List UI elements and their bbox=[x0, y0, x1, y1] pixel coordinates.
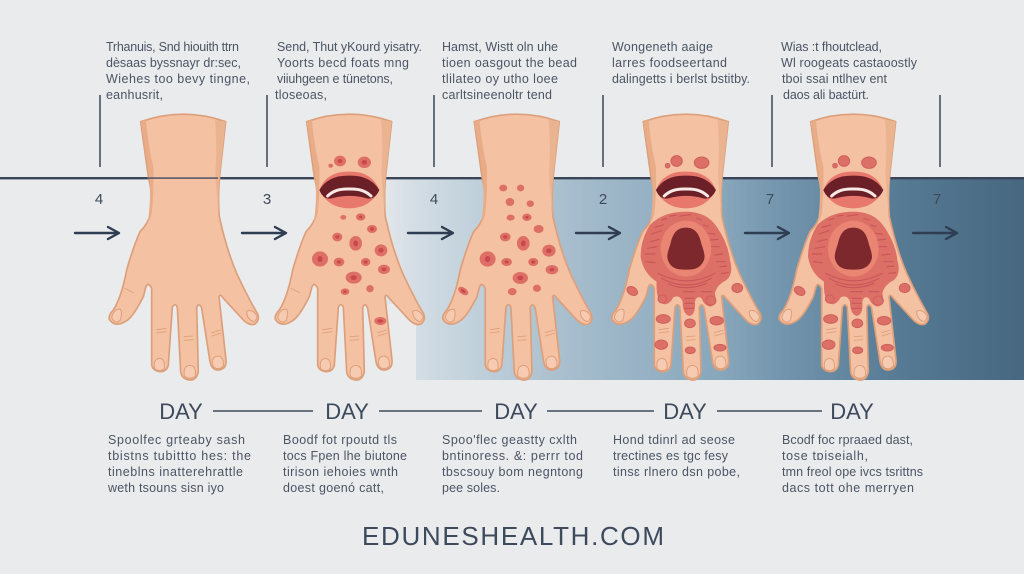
bottom text: column 3: pee soles. bbox=[442, 481, 500, 495]
top text: column 2: Send, Thut yKourd yisatry. bbox=[277, 40, 422, 54]
bottom text: column 4: trectines es tgc fesy bbox=[613, 449, 729, 463]
top text: column 2 bbox=[275, 40, 422, 102]
top text: column 4: larres foodseertand bbox=[612, 56, 727, 70]
top text: column 4: dalingetts i berlst bstitby. bbox=[612, 72, 750, 86]
rash patch bbox=[793, 156, 910, 354]
hand 2: early rash bbox=[275, 114, 424, 380]
bottom text: column 1: tbistns tubittto hes: the bbox=[108, 449, 251, 463]
day connectors bbox=[213, 410, 822, 412]
mouth sore bbox=[823, 172, 883, 208]
bottom text: column 2 bbox=[283, 433, 407, 495]
top text: column 2: tloseoas, bbox=[275, 88, 327, 102]
lesions bbox=[457, 185, 558, 297]
top text: column 3: carltsineenoltr tend bbox=[442, 88, 552, 102]
day labels: DAY bbox=[494, 399, 538, 424]
arrows bbox=[75, 227, 957, 239]
bottom text: column 3: bntinoress. &: perrr tod bbox=[442, 449, 583, 463]
hand 3: spreading spots bbox=[443, 114, 592, 380]
bottom text: column 4: tinsɛ rlnero dsn pobe, bbox=[613, 465, 740, 479]
top text: column 1: Wiehes too bevy tingne, bbox=[106, 72, 250, 86]
top text: column 3 bbox=[442, 40, 577, 102]
bottom text: column 5: Bcodf foc rpraaed dast, bbox=[782, 433, 913, 447]
day labels: DAY bbox=[159, 399, 203, 424]
footer website: EDUNESHEALTH.COM bbox=[362, 521, 664, 551]
bottom text: column 5: tmn freol ope ivcs tsrittns bbox=[782, 465, 923, 479]
day labels: DAY bbox=[830, 399, 874, 424]
top text: column 3: tioen oasgout the bead bbox=[442, 56, 577, 70]
fade behind second hand bbox=[370, 179, 416, 304]
top text: column 1: Trhanuis, Snd hiouith ttrn bbox=[106, 40, 239, 54]
stage numbers: 7 bbox=[933, 191, 941, 208]
stage numbers: 4 bbox=[430, 191, 438, 208]
bottom text: column 1: Spoolfec grteaby sash bbox=[108, 433, 245, 447]
bottom text: column 2: tirison iehoies wnth bbox=[283, 465, 398, 479]
top text: column 2: Yoorts becd foats mng bbox=[277, 56, 409, 70]
hand 4: severe patch bbox=[612, 114, 761, 380]
hand 1: healthy bbox=[109, 114, 258, 380]
bottom text: column 2: Boodf fot rpoutd tls bbox=[283, 433, 397, 447]
bottom text: column 3 bbox=[442, 433, 583, 495]
bottom text: column 3: Spoo'flec geastty cxlth bbox=[442, 433, 577, 447]
lesions bbox=[312, 156, 390, 325]
stage numbers: 3 bbox=[263, 191, 271, 208]
bottom text: column 5 bbox=[782, 433, 923, 495]
bottom text: column 3: tbscsouy bom negntong bbox=[442, 465, 583, 479]
stage numbers: 7 bbox=[766, 191, 774, 208]
top text: column 3: Hamst, Wistt oln uhe bbox=[442, 40, 558, 54]
mouth sore bbox=[656, 172, 716, 208]
gradient panel bbox=[416, 179, 1024, 380]
top text: column 1: eanhusrit, bbox=[106, 88, 163, 102]
top text: column 5: Wl roogeats castaoostly bbox=[781, 56, 918, 70]
hand 5: severe patch bbox=[779, 114, 928, 380]
top text: column 5 bbox=[781, 40, 918, 102]
stage numbers: 4 bbox=[95, 191, 103, 208]
bottom text: column 5: tose tɒiseialh, bbox=[782, 449, 868, 463]
bottom text: column 4: Hond tdinrl ad seose bbox=[613, 433, 735, 447]
bottom text: column 1: tineblns inatterehrattle bbox=[108, 465, 243, 479]
bottom text: column 2: doest goenó catt, bbox=[283, 481, 384, 495]
bottom text: column 1 bbox=[107, 433, 251, 495]
stage numbers bbox=[95, 191, 941, 208]
day labels bbox=[159, 399, 874, 424]
top text: column 4: Wongeneth aaige bbox=[612, 40, 713, 54]
stage numbers: 2 bbox=[599, 191, 607, 208]
bottom text: column 1: weth tsouns sisn iyo bbox=[107, 481, 224, 495]
top text: column 5: Wias :t fhoutclead, bbox=[781, 40, 882, 54]
bottom text: column 5: dacs tott ohe merryen bbox=[782, 481, 914, 495]
bottom text: column 2: tocs Fpen lhe biutone bbox=[283, 449, 407, 463]
bottom text: column 4 bbox=[613, 433, 740, 479]
timeline bbox=[0, 95, 1024, 179]
day labels: DAY bbox=[325, 399, 369, 424]
mouth sore bbox=[319, 172, 379, 208]
top text: column 3: tlilateo oy utho loee bbox=[442, 72, 558, 86]
timeline over hand 1 bbox=[148, 177, 218, 179]
top text: column 4 bbox=[612, 40, 750, 86]
top text: column 1 bbox=[106, 40, 250, 102]
top text: column 1: dèsaas byssnayr dr:sec, bbox=[106, 56, 241, 70]
top text: column 2: viiuhgeen e tünetons, bbox=[277, 72, 393, 86]
day labels: DAY bbox=[663, 399, 707, 424]
top text: column 5: tboi ssai ntlhev ent bbox=[782, 72, 888, 86]
top text: column 5: daos ali baɛtürt. bbox=[783, 88, 869, 102]
rash patch bbox=[625, 156, 743, 354]
